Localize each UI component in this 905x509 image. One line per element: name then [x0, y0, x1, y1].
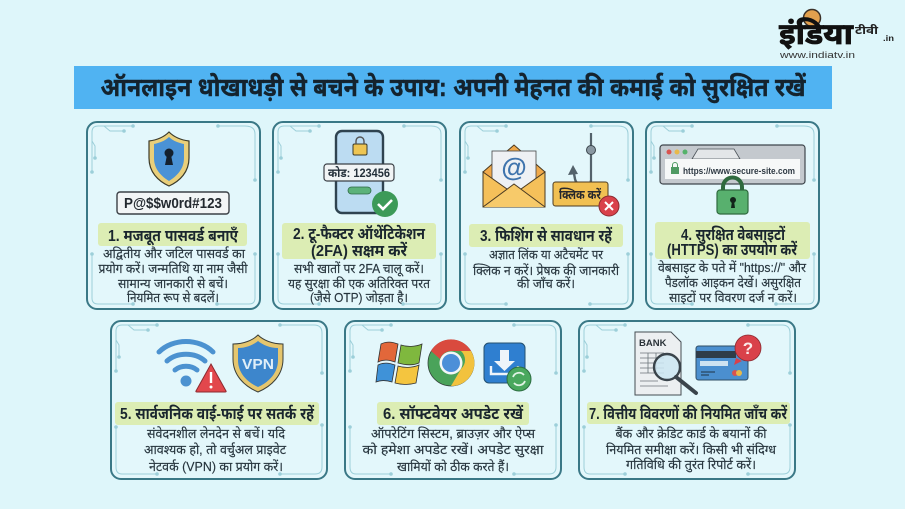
text 7 [606, 426, 777, 473]
heading 4 [655, 222, 810, 259]
icon: VPN shield: VPN [242, 356, 274, 373]
text 1: प्रयोग करें। जन्मतिथि या नाम जैसी [98, 261, 248, 276]
panel: 5 public wifi [111, 321, 327, 479]
heading 1 [98, 223, 247, 246]
icon: credit card with question [696, 335, 761, 380]
heading 2: 2. टू-फैक्टर ऑथेंटिकेशन [293, 224, 426, 244]
heading 7 [587, 402, 790, 424]
heading 4: (HTTPS) का उपयोग करें [667, 240, 798, 259]
text 2 [288, 261, 431, 305]
title banner [74, 66, 832, 109]
text 5 [144, 426, 286, 474]
heading 2: (2FA) सक्षम करें [311, 241, 408, 260]
icon: browser window: https://www.secure-site.com [683, 166, 795, 177]
icon: phone with code: कोड: 123456 [328, 165, 390, 180]
heading 7: 7. वित्तीय विवरणों की नियमित जाँच करें [589, 404, 788, 423]
logo: India TV: टीवी [855, 24, 879, 37]
text 7: नियमित समीक्षा करें। किसी भी संदिग्ध [606, 442, 777, 457]
text 5: संवेदनशील लेनदेन से बचें। यदि [147, 426, 286, 441]
heading 1: 1. मजबूत पासवर्ड बनाएँ [108, 226, 238, 246]
title banner: ऑनलाइन धोखाधड़ी से बचने के उपाय: अपनी मेहनत की कमाई को सुरक्षित रखें [100, 72, 807, 103]
text 6: ऑपरेटिंग सिस्टम, ब्राउज़र और ऐप्स [371, 426, 535, 441]
panel: 3 phishing [460, 122, 633, 309]
logo: India TV: www.indiatv.in [779, 50, 855, 61]
icon: envelope with at sign [483, 145, 545, 207]
text 1: सामान्य जानकारी से बचें। [118, 276, 228, 291]
icon: shield with keyhole [149, 132, 189, 186]
text 2: सभी खातों पर 2FA चालू करें। [294, 261, 424, 277]
heading 5: 5. सार्वजनिक वाई-फाई पर सतर्क रहें [120, 404, 315, 423]
password field: P@$$w0rd#123 [124, 195, 222, 212]
heading 4: 4. सुरक्षित वेबसाइटों [681, 225, 786, 245]
panel: 1 strong password [87, 122, 260, 309]
logo: India TV: इंडिया [779, 17, 854, 51]
logo: India TV: .in [883, 34, 894, 43]
text 2: यह सुरक्षा की एक अतिरिक्त परत [288, 276, 431, 292]
text 3: क्लिक न करें। प्रेषक की जानकारी [473, 263, 620, 278]
panel: 2 two-factor authentication [273, 122, 446, 309]
heading 5 [115, 402, 319, 425]
text 3: अज्ञात लिंक या अटैचमेंट पर [489, 247, 604, 262]
icon: green padlock [717, 178, 748, 214]
text 5: नेटवर्क (VPN) का प्रयोग करें। [149, 459, 283, 474]
text 3 [473, 247, 620, 291]
text 3: की जाँच करें। [517, 276, 575, 291]
icon: wifi with warning [159, 342, 226, 392]
icon: download update [484, 343, 531, 391]
text 6 [362, 426, 544, 474]
text 4: साइटों पर विवरण दर्ज न करें। [669, 290, 797, 305]
icon: envelope with at sign: @ [501, 152, 527, 182]
text 7: गतिविधि की तुरंत रिपोर्ट करें। [626, 457, 756, 473]
heading 2 [282, 223, 436, 260]
text 6: को हमेशा अपडेट रखें। अपडेट सुरक्षा [362, 442, 544, 458]
icon: credit card with question: ? [743, 339, 753, 358]
text 1: नियमित रूप से बदलें। [127, 290, 219, 305]
panel: 7 financial statements [579, 321, 795, 479]
icon: windows logo [376, 342, 422, 384]
icon: bank statement with magnifier: BANK [639, 338, 667, 349]
icon: chrome browser [428, 339, 474, 386]
icon: bank statement with magnifier [635, 332, 696, 395]
heading 6 [377, 402, 529, 425]
panel: 6 software updates [345, 321, 561, 479]
heading 6: 6. सॉफ्टवेयर अपडेट रखें [383, 404, 524, 423]
text 4 [658, 260, 807, 305]
icon: VPN shield [233, 335, 283, 392]
heading 3: 3. फिशिंग से सावधान रहें [480, 226, 613, 245]
text 6: खामियों को ठीक करते हैं। [397, 459, 509, 474]
panel: 4 secure websites [646, 122, 819, 309]
heading 3 [469, 224, 623, 247]
text 1: अद्वितीय और जटिल पासवर्ड का [103, 246, 246, 261]
text 1 [98, 246, 248, 305]
logo: India TV [779, 10, 894, 61]
text 4: पैडलॉक आइकन देखें। असुरक्षित [665, 275, 802, 291]
text 2: (जैसे OTP) जोड़ता है। [310, 290, 408, 305]
text 4: वेबसाइट के पते में "https://" और [658, 260, 807, 275]
icon: phone with code [324, 131, 398, 217]
text 5: आवश्यक हो, तो वर्चुअल प्राइवेट [144, 442, 286, 458]
icon: fish hook with click button: क्लिक करें [559, 187, 602, 202]
icon: fish hook with click button [553, 133, 619, 216]
text 7: बैंक और क्रेडिट कार्ड के बयानों की [616, 426, 767, 441]
icon: browser window [660, 145, 805, 184]
